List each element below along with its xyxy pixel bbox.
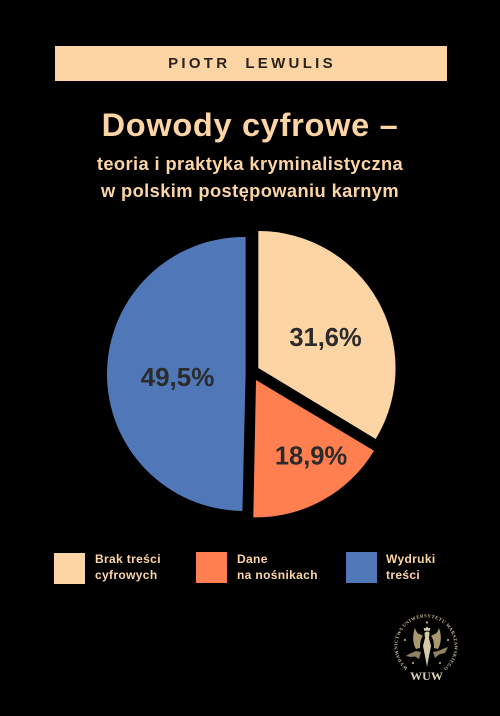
emblem ring text: WYDAWNICTWA UNIWERSYTETU WARSZAWSKIEGO — [394, 614, 458, 670]
author banner: PIOTR LEWULIS — [168, 55, 336, 72]
legend swatch: Brak treści cyfrowych — [54, 553, 85, 584]
legend swatch: Dane na nośnikach — [196, 552, 227, 583]
value: 31,6%: 31,6% — [289, 324, 362, 352]
value: 49,5%: 49,5% — [141, 362, 214, 392]
legend swatch: Wydruki treści — [346, 552, 377, 583]
subtitle: teoria i praktyka kryminalistyczna — [97, 153, 403, 174]
publisher emblem — [394, 614, 458, 683]
slice: Dane na nośnikach 18,9% — [253, 380, 374, 517]
author banner — [55, 46, 447, 81]
legend label: Brak treści cyfrowych: cyfrowych — [95, 568, 158, 582]
slice: Wydruki treści 49,5% — [107, 237, 246, 511]
legend label: Wydruki treści: treści — [386, 568, 420, 582]
legend label: Wydruki treści — [386, 552, 436, 582]
subtitle: w polskim postępowaniu karnym — [101, 180, 399, 201]
slice: Brak treści cyfrowych 31,6% — [258, 231, 396, 439]
eagle — [404, 621, 449, 667]
emblem initials: WUW — [410, 669, 443, 683]
emblem stars — [426, 621, 428, 624]
legend label: Brak treści cyfrowych: Brak treści — [95, 552, 161, 566]
value: 18,9%: 18,9% — [275, 442, 347, 470]
subtitle — [97, 153, 403, 201]
legend label: Dane na nośnikach — [237, 552, 318, 582]
legend label: Brak treści cyfrowych — [95, 552, 161, 582]
legend label: Dane na nośnikach: Dane — [237, 552, 268, 566]
title: Dowody cyfrowe – — [102, 107, 398, 143]
legend label: Wydruki treści: Wydruki — [386, 552, 436, 566]
legend label: Dane na nośnikach: na nośnikach — [237, 568, 318, 582]
